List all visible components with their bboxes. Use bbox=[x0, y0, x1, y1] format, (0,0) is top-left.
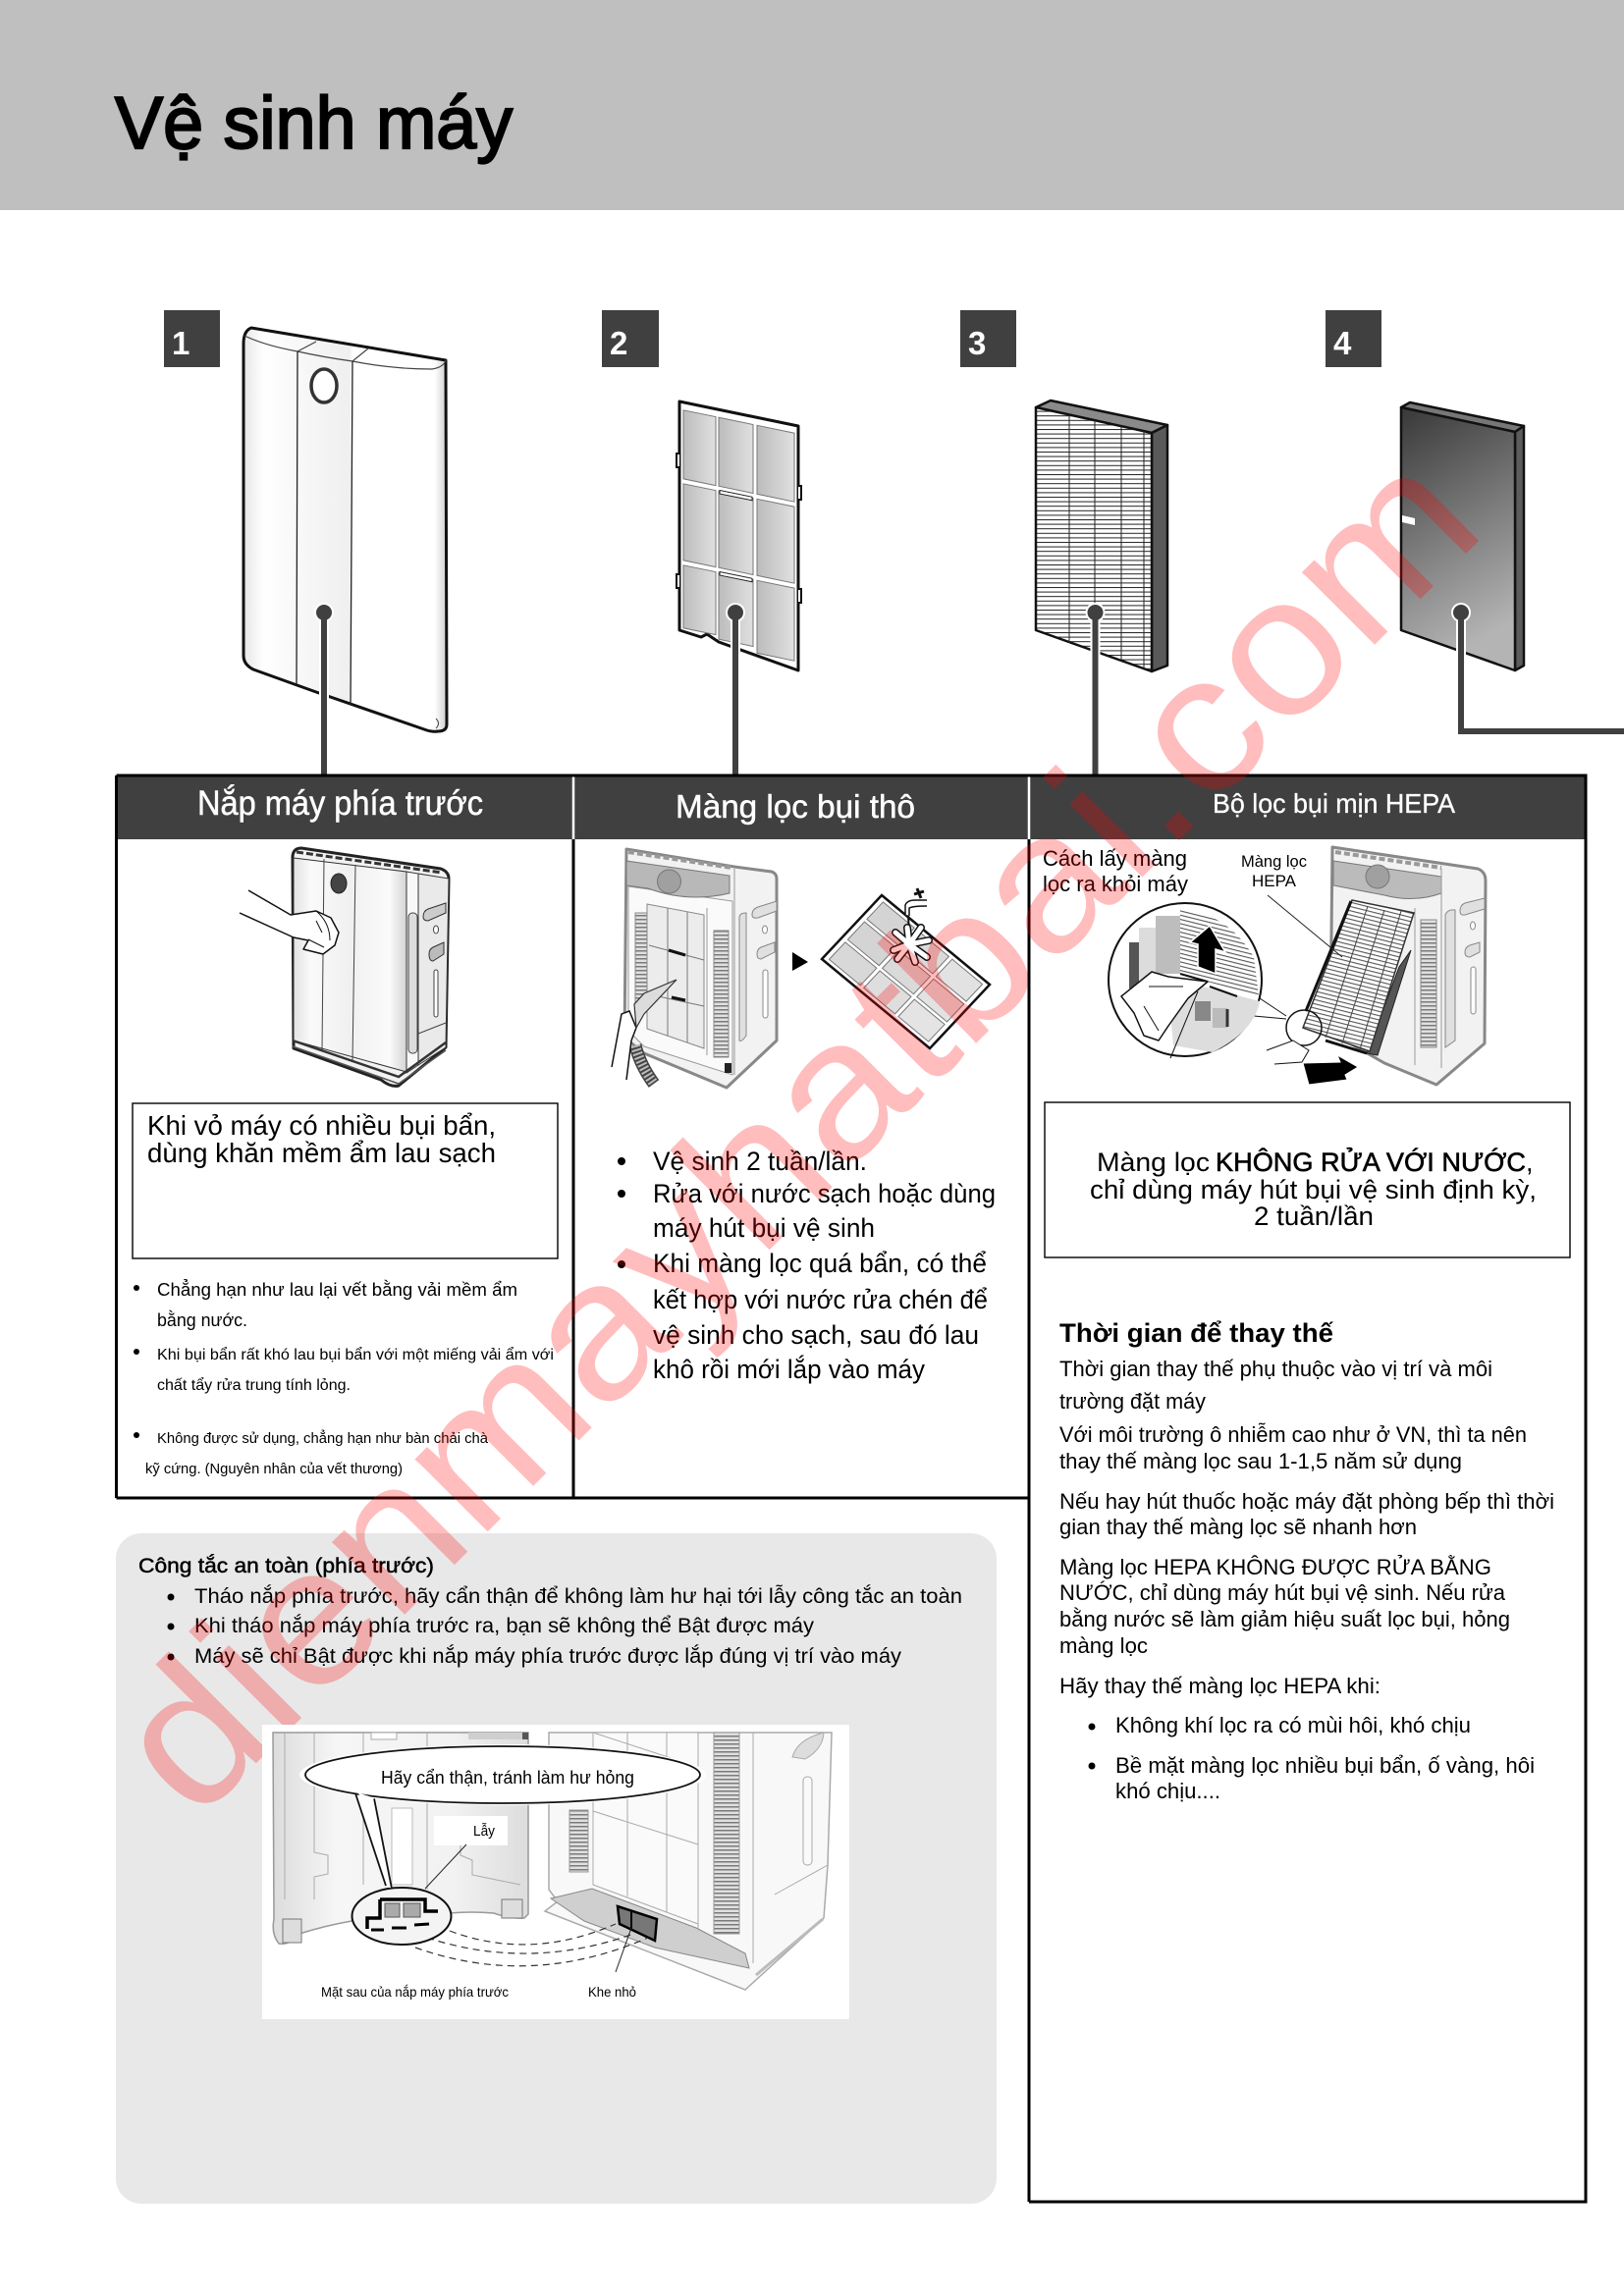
replacement details bbox=[1059, 1357, 1554, 1803]
title: Vệ sinh máy bbox=[115, 81, 513, 164]
panel bullets bbox=[167, 1583, 962, 1668]
number badge 2: 2 bbox=[610, 325, 627, 361]
replacement details: bằng nước sẽ làm giảm hiệu suất lọc bụi, hỏng bbox=[1059, 1607, 1510, 1631]
number badge 4: 4 bbox=[1333, 325, 1352, 361]
back of front cover bbox=[273, 1733, 528, 1944]
col 2 instructions: Vệ sinh 2 tuần/lần. bbox=[653, 1147, 867, 1176]
replacement details: gian thay thế màng lọc sẽ nhanh hơn bbox=[1059, 1515, 1417, 1539]
panel bullets: Máy sẽ chỉ Bật được khi nắp máy phía trước được lắp đúng vị trí vào máy bbox=[194, 1643, 901, 1668]
col 2 instructions: vệ sinh cho sạch, sau đó lau bbox=[653, 1320, 979, 1350]
leader line 2 bbox=[726, 603, 745, 775]
replacement details: Thời gian thay thế phụ thuộc vào vị trí và môi bbox=[1059, 1357, 1492, 1381]
col 2 instructions: khô rồi mới lắp vào máy bbox=[653, 1354, 925, 1384]
col 2 instructions: máy hút bụi vệ sinh bbox=[653, 1213, 875, 1243]
cover cleaning notes: Không được sử dụng, chẳng hạn như bàn chải chà bbox=[157, 1429, 489, 1447]
cover cleaning notes: Khi bụi bẩn rất khó lau bụi bẩn với một miếng vải ẩm với bbox=[157, 1346, 554, 1363]
replacement details: Với môi trường ô nhiễm cao như ở VN, thì ta nên bbox=[1059, 1422, 1527, 1447]
part: deodorising filter bbox=[1401, 402, 1524, 670]
callout box: HEPA warning bbox=[1045, 1102, 1570, 1257]
cover cleaning notes bbox=[134, 1279, 554, 1477]
leader line 4 bbox=[1451, 603, 1624, 731]
replacement details: Hãy thay thế màng lọc HEPA khi: bbox=[1059, 1674, 1380, 1698]
label: HEPA filter: Màng lọc bbox=[1241, 853, 1307, 871]
callout box: cover cleaning bbox=[133, 1103, 558, 1258]
col 2 instructions: kết hợp với nước rửa chén để bbox=[653, 1285, 988, 1314]
illustration: safety switch bbox=[262, 1725, 849, 2019]
replacement details: màng lọc bbox=[1059, 1633, 1148, 1658]
hand with cloth bbox=[240, 890, 339, 954]
callout box: cover cleaning: dùng khăn mềm ẩm lau sạch bbox=[147, 1138, 496, 1168]
callout box: cover cleaning: Khi vỏ máy có nhiều bụi bẩn, bbox=[147, 1110, 496, 1141]
label: slot bbox=[588, 1928, 636, 2000]
col 2 instructions: Khi màng lọc quá bẩn, có thể bbox=[653, 1249, 987, 1278]
panel bullets: Tháo nắp phía trước, hãy cẩn thận để không làm hư hại tới lẫy công tắc an toàn bbox=[194, 1583, 962, 1608]
label: HEPA filter: HEPA bbox=[1252, 873, 1296, 890]
magnifier: latch bbox=[352, 1888, 452, 1945]
replacement details: Bề mặt màng lọc nhiều bụi bẩn, ố vàng, hôi bbox=[1115, 1753, 1535, 1778]
rotated filter under tap bbox=[822, 888, 990, 1048]
column heading 1: Nắp máy phía trước bbox=[197, 784, 483, 823]
callout box: HEPA warning: 2 tuần/lần bbox=[1254, 1201, 1374, 1231]
leader line 3 bbox=[1086, 603, 1106, 775]
cover cleaning notes: Chẳng hạn như lau lại vết bằng vải mềm ẩm bbox=[157, 1279, 517, 1300]
callout box: HEPA warning: KHÔNG RỬA VỚI NƯỚC bbox=[1216, 1146, 1526, 1177]
arrow: next step bbox=[792, 952, 808, 971]
column heading 2: Màng lọc bụi thô bbox=[676, 788, 915, 825]
illustration: wiping the front cover bbox=[240, 848, 449, 1086]
label: how to remove: Cách lấy màng bbox=[1043, 846, 1187, 871]
cover cleaning notes: bằng nước. bbox=[157, 1309, 247, 1330]
replacement details: khó chịu.... bbox=[1115, 1779, 1220, 1803]
magnified inset bbox=[1109, 903, 1286, 1058]
col 2 instructions bbox=[618, 1147, 996, 1384]
arrow: lift upward bbox=[1190, 926, 1225, 974]
unit body bbox=[1330, 847, 1486, 1085]
replacement details: NƯỚC, chỉ dùng máy hút bụi vệ sinh. Nếu rửa bbox=[1059, 1580, 1506, 1605]
label: latch bbox=[425, 1816, 508, 1889]
label: slot: Khe nhỏ bbox=[588, 1984, 636, 2000]
hand holding vacuum nozzle bbox=[612, 980, 677, 1084]
number badge 1 bbox=[164, 310, 220, 367]
part: coarse dust filter bbox=[677, 401, 801, 670]
cover cleaning notes: chất tẩy rửa trung tính lỏng. bbox=[157, 1376, 351, 1394]
callout bubble: Hãy cẩn thận, tránh làm hư hỏng bbox=[381, 1767, 634, 1788]
label: HEPA filter bbox=[1241, 853, 1307, 890]
label: how to remove bbox=[1043, 846, 1189, 896]
number badge 3: 3 bbox=[968, 325, 986, 361]
callout box: HEPA warning: chỉ dùng máy hút bụi vệ sinh định kỳ, bbox=[1090, 1175, 1537, 1204]
leader line 1 bbox=[314, 603, 334, 775]
dashed guides bbox=[415, 1924, 648, 1966]
number badge 1: 1 bbox=[172, 325, 189, 361]
slot bbox=[618, 1906, 657, 1941]
pulled-out filter bbox=[1303, 900, 1414, 1055]
label: how to remove: lọc ra khỏi máy bbox=[1043, 872, 1189, 896]
callout box: HEPA warning: Màng lọc bbox=[1097, 1148, 1210, 1177]
label: latch: Lẫy bbox=[473, 1823, 496, 1840]
replacement details: Màng lọc HEPA KHÔNG ĐƯỢC RỬA BẰNG bbox=[1059, 1555, 1491, 1579]
arrow: pull out bbox=[1303, 1055, 1358, 1085]
replacement details: Nếu hay hút thuốc hoặc máy đặt phòng bếp thì thời bbox=[1059, 1489, 1554, 1514]
callout bubble bbox=[299, 1744, 706, 1889]
column heading 3: Bộ lọc bụi mịn HEPA bbox=[1213, 788, 1456, 819]
number badge 2 bbox=[602, 310, 659, 367]
panel: safety switch bbox=[116, 1533, 997, 2204]
replacement details: thay thế màng lọc sau 1-1,5 năm sử dụng bbox=[1059, 1449, 1462, 1473]
cover cleaning notes: kỹ cứng. (Nguyên nhân của vết thương) bbox=[145, 1461, 403, 1477]
replacement details: trường đặt máy bbox=[1059, 1389, 1206, 1414]
table: maintenance columns bbox=[116, 775, 1586, 2202]
label: back of cover: Mặt sau của nắp máy phía trước bbox=[321, 1984, 509, 2000]
illustration: removing the HEPA filter bbox=[1043, 846, 1486, 1085]
replacement details: Không khí lọc ra có mùi hôi, khó chịu bbox=[1115, 1713, 1471, 1737]
part: HEPA filter bbox=[1036, 400, 1167, 671]
header band bbox=[0, 0, 1624, 210]
part: front cover bbox=[244, 328, 447, 731]
col 2 instructions: Rửa với nước sạch hoặc dùng bbox=[653, 1179, 996, 1208]
watermark: dienmayhatbai.com bbox=[71, 406, 1518, 1853]
section heading: Thời gian để thay thế bbox=[1059, 1318, 1333, 1348]
number badge 4 bbox=[1326, 310, 1381, 367]
panel bullets: Khi tháo nắp máy phía trước ra, bạn sẽ không thể Bật được máy bbox=[194, 1613, 814, 1637]
callout box: HEPA warning: , bbox=[1526, 1148, 1534, 1177]
unit base bbox=[545, 1733, 832, 1990]
panel heading: Công tắc an toàn (phía trước) bbox=[138, 1553, 434, 1577]
illustration: vacuuming and washing the dust filter bbox=[612, 849, 990, 1088]
number badge 3 bbox=[960, 310, 1016, 367]
replacement time section bbox=[1059, 1318, 1554, 1803]
